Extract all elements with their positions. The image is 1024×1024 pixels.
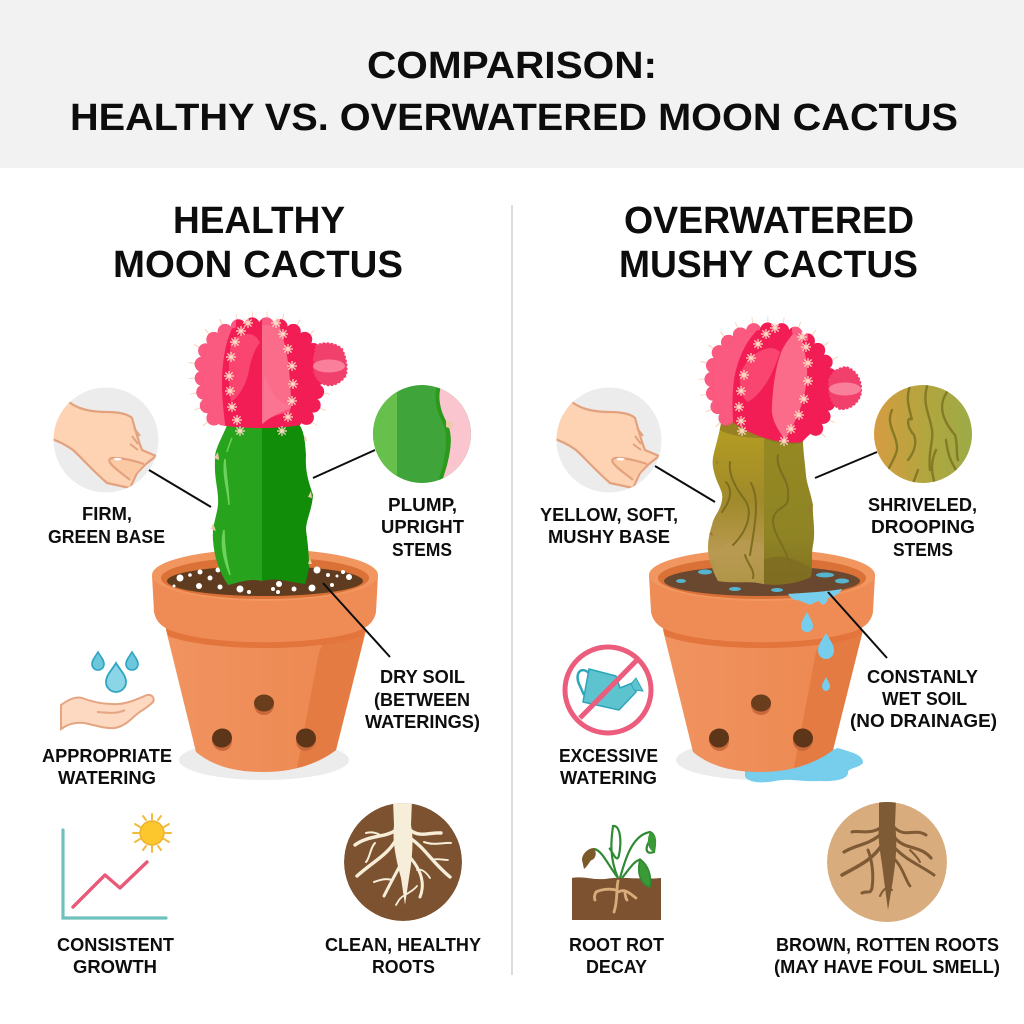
heading: overwatered mushy cactus: OVERWATERED: [624, 200, 914, 242]
label: constantly wet soil: WET SOIL: [882, 689, 967, 709]
heading: overwatered mushy cactus: [619, 200, 918, 286]
label: constantly wet soil: (NO DRAINAGE): [850, 711, 997, 731]
label: plump upright stems: UPRIGHT: [381, 517, 464, 537]
icon: root rot plant: [572, 826, 661, 920]
label: plump upright stems: [381, 495, 464, 560]
icon: clean healthy roots: [344, 800, 462, 921]
title banner: HEALTHY VS. OVERWATERED MOON CACTUS: [70, 97, 958, 139]
label: dry soil: DRY SOIL: [380, 667, 465, 687]
icon: shriveled stem detail: [874, 385, 972, 484]
soil specks: [172, 566, 352, 594]
soil puddles and overflowing water: [676, 570, 849, 691]
icon: plump stem detail: [373, 385, 473, 485]
label: shriveled drooping stems: STEMS: [893, 540, 953, 560]
title banner: COMPARISON:: [367, 45, 657, 87]
label: yellow soft mushy base: MUSHY BASE: [548, 527, 670, 547]
label: appropriate watering: WATERING: [58, 768, 156, 788]
overwatered pot: [649, 549, 875, 782]
label: yellow soft mushy base: YELLOW, SOFT,: [540, 505, 678, 525]
heading: overwatered mushy cactus: MUSHY CACTUS: [619, 244, 918, 286]
callout lines: [149, 450, 887, 658]
icon: brown rotten roots: [827, 800, 947, 922]
label: excessive watering: EXCESSIVE: [559, 746, 658, 766]
label: appropriate watering: APPROPRIATE: [42, 746, 172, 766]
label: shriveled drooping stems: SHRIVELED,: [868, 495, 977, 515]
heading: healthy moon cactus: HEALTHY: [173, 200, 345, 242]
label: brown rotten roots: BROWN, ROTTEN ROOTS: [776, 935, 999, 955]
label: firm green base: [48, 504, 165, 547]
label: root rot decay: [569, 935, 664, 977]
label: brown rotten roots: (MAY HAVE FOUL SMELL): [774, 957, 1000, 977]
healthy pink head: [190, 310, 347, 436]
label: firm green base: FIRM,: [82, 504, 132, 524]
label: shriveled drooping stems: [868, 495, 977, 560]
label: appropriate watering: [42, 746, 172, 788]
label: shriveled drooping stems: DROOPING: [871, 517, 975, 537]
icon: growth chart with sun: [63, 814, 171, 918]
label: constantly wet soil: CONSTANLY: [867, 667, 978, 687]
label: firm green base: GREEN BASE: [48, 527, 165, 547]
label: clean healthy roots: [325, 935, 481, 977]
label: consistent growth: CONSISTENT: [57, 935, 174, 955]
label: root rot decay: ROOT ROT: [569, 935, 664, 955]
label: plump upright stems: PLUMP,: [388, 495, 457, 515]
healthy green stem: [211, 420, 313, 585]
icon: firm base hand: [54, 388, 158, 492]
heading: healthy moon cactus: [113, 200, 403, 286]
icon: yellow soft base hand: [556, 388, 662, 492]
label: dry soil: [365, 667, 480, 732]
label: consistent growth: GROWTH: [73, 957, 157, 977]
label: constantly wet soil: [850, 667, 997, 731]
overwatered pink head: [700, 320, 861, 450]
heading: healthy moon cactus: MOON CACTUS: [113, 244, 403, 286]
label: consistent growth: [57, 935, 174, 977]
icon: appropriate watering hand and drops: [61, 652, 154, 729]
overwatered mushy stem: [708, 422, 814, 585]
label: clean healthy roots: CLEAN, HEALTHY: [325, 935, 481, 955]
label: dry soil: (BETWEEN: [374, 690, 470, 710]
label: dry soil: WATERINGS): [365, 712, 480, 732]
icon: no excessive watering: [565, 647, 651, 733]
label: excessive watering: [559, 746, 658, 788]
label: brown rotten roots: [774, 935, 1000, 977]
healthy pot: [152, 549, 378, 780]
label: clean healthy roots: ROOTS: [372, 957, 435, 977]
label: root rot decay: DECAY: [586, 957, 647, 977]
label: plump upright stems: STEMS: [392, 540, 452, 560]
label: yellow soft mushy base: [540, 505, 678, 547]
title banner: [0, 0, 1024, 168]
label: excessive watering: WATERING: [560, 768, 657, 788]
